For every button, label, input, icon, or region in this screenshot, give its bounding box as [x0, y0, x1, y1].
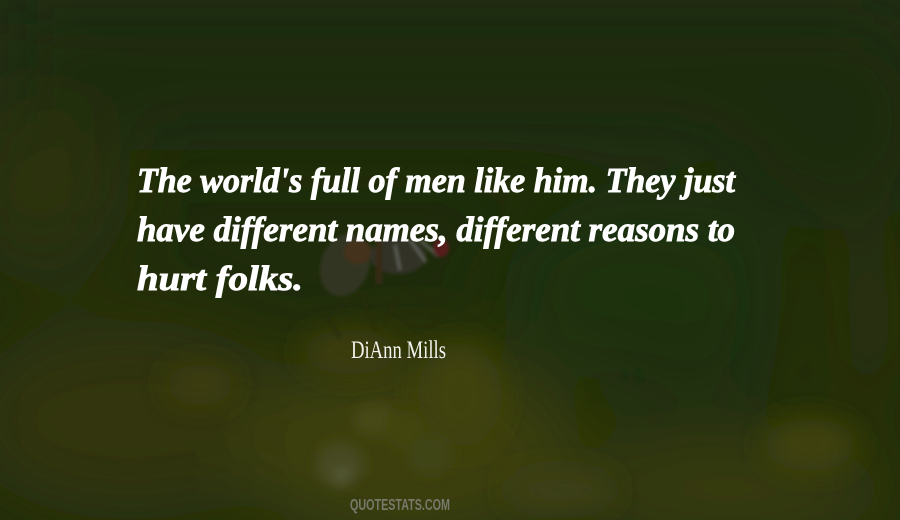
fly body	[312, 227, 438, 303]
author name: DiAnn Mills	[351, 337, 446, 364]
quote line 1: The world's full of men like him. They just	[137, 161, 736, 200]
fly legs	[328, 285, 437, 338]
quote line 3: hurt folks.	[137, 259, 303, 298]
fly eye	[433, 239, 449, 257]
quote line 2: have different names, different reasons to	[137, 210, 735, 249]
flower cluster	[316, 404, 452, 487]
quote text	[137, 161, 736, 298]
watermark: QUOTESTATS.COM	[350, 497, 450, 514]
fly photo subject	[312, 227, 449, 338]
